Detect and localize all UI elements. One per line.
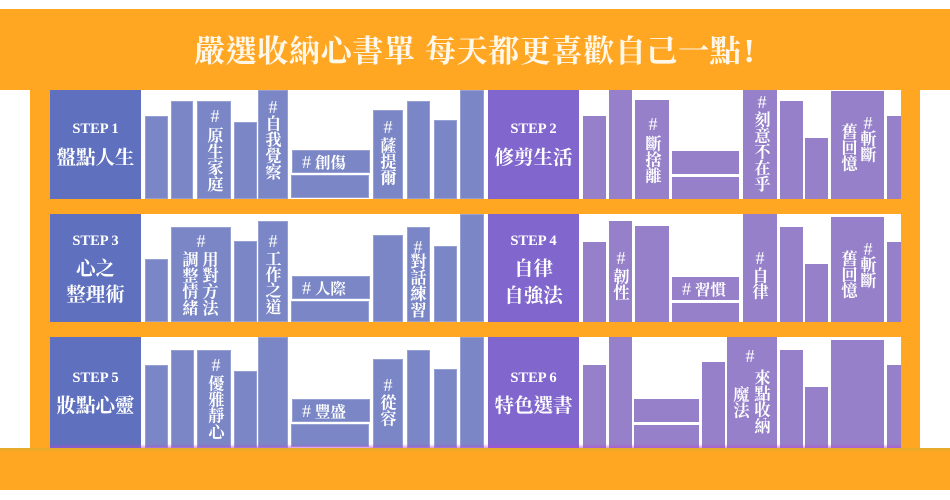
panel: step 2: STEP 2 (510, 121, 557, 137)
book: 豐盛 (292, 399, 370, 422)
book: 斷捨離: 斷捨離 (642, 135, 660, 184)
book: 自律 (743, 214, 777, 322)
book: 從容: # (384, 375, 392, 395)
panel: step 3: STEP 3 (72, 233, 119, 249)
panel: step 1: STEP 1 (72, 121, 119, 137)
book (805, 138, 828, 199)
book: 用對方法 調整情緒: # (196, 231, 206, 251)
book: 工作之道 (258, 221, 288, 322)
panel: step 5: STEP 5 (72, 370, 119, 386)
book: 豐盛: # 豐盛 (302, 401, 346, 421)
book: 用對方法 調整情緒: 調整情緒 (180, 251, 198, 316)
book (805, 387, 828, 448)
book (145, 259, 168, 322)
panel: step 5: 妝點心靈 (56, 396, 134, 417)
panel: step 5 (50, 337, 141, 448)
panel: step 4: 自強法 (504, 286, 563, 307)
book: 從容: 從容 (378, 394, 396, 426)
book (407, 350, 430, 448)
book (672, 177, 739, 199)
book (460, 90, 484, 199)
band between rows 1 and 2 (30, 199, 920, 214)
panel: step 3: 整理術 (66, 285, 125, 306)
book: 優雅靜心: 優雅靜心 (206, 375, 224, 440)
book (780, 227, 803, 322)
book (780, 350, 803, 448)
book (609, 337, 632, 448)
book: 來點收納魔法 (727, 337, 777, 448)
book (634, 425, 699, 448)
book (434, 246, 457, 322)
book (583, 365, 606, 448)
book: 斷捨離: # (648, 114, 658, 134)
book: 斬斷舊回憶: 斬斷 (858, 256, 876, 288)
book (407, 101, 430, 199)
book: 韌性: # (616, 248, 626, 268)
title: 嚴選收納心書單 每天都更喜歡自己一點! (194, 33, 755, 70)
book (805, 264, 828, 322)
book (460, 337, 484, 448)
book (583, 116, 606, 199)
book: 斬斷舊回憶: # (864, 113, 872, 133)
book (887, 116, 901, 199)
bottom orange band (0, 448, 950, 490)
book (434, 120, 457, 199)
book: 來點收納魔法: 來點收納 (752, 369, 770, 434)
frame: left orange column (30, 85, 50, 455)
book: 從容 (373, 359, 403, 448)
book (234, 241, 257, 322)
panel: step 4 (488, 214, 579, 322)
book: 習慣 (672, 277, 739, 300)
book: 斷捨離 (635, 100, 669, 199)
book: 薩提爾: # (384, 117, 392, 137)
book (291, 301, 369, 322)
book: 對話練習 (407, 227, 430, 322)
panel: step 2: 修剪生活 (494, 148, 572, 169)
book (634, 399, 699, 422)
book: 來點收納魔法: # (746, 346, 754, 366)
book: 工作之道: # (268, 231, 278, 251)
book: 斬斷舊回憶: 舊回憶 (838, 123, 856, 172)
book: 創傷 (292, 150, 370, 173)
book (460, 214, 484, 322)
book: 斬斷舊回憶: 斬斷 (858, 130, 876, 162)
book (831, 340, 884, 448)
book: 自律: 自律 (750, 267, 768, 299)
panel: step 3 (50, 214, 141, 322)
book (234, 371, 257, 448)
book: 原生家庭: # (210, 106, 220, 126)
book (234, 122, 257, 199)
book: 刻意不在乎: # (758, 92, 766, 112)
book (171, 350, 194, 448)
shelf row 3 (50, 337, 901, 448)
book: 薩提爾 (373, 110, 403, 199)
book: 原生家庭 (197, 101, 231, 199)
book: 來點收納魔法: 魔法 (730, 386, 748, 418)
book (780, 101, 803, 199)
panel: step 6: STEP 6 (510, 370, 557, 386)
panel: step 1: 盤點人生 (56, 148, 134, 169)
book: 斬斷舊回憶 (831, 217, 884, 322)
shelf row 1 (50, 90, 901, 199)
book: 對話練習: # (414, 237, 422, 257)
book: 薩提爾: 薩提爾 (378, 137, 396, 186)
book: 自我覺察 (258, 90, 288, 199)
shelf row 2 (50, 214, 901, 322)
book (672, 303, 739, 322)
book: 對話練習: 對話練習 (408, 253, 426, 318)
book: 用對方法 調整情緒: 用對方法 (200, 251, 218, 316)
book (373, 235, 403, 322)
book: 刻意不在乎: 刻意不在乎 (752, 111, 770, 192)
book (702, 362, 725, 448)
book: 刻意不在乎 (743, 90, 777, 199)
book: 優雅靜心: # (212, 355, 220, 375)
book: 自我覺察: # (268, 97, 278, 117)
panel: step 4: 自律 (514, 259, 553, 280)
book: 人際: # 人際 (302, 278, 346, 298)
book: 工作之道: 工作之道 (262, 250, 280, 315)
shelf bottom tint (50, 444, 901, 448)
book (887, 365, 901, 448)
band between rows 2 and 3 (30, 322, 920, 337)
book (635, 226, 669, 322)
book (609, 90, 632, 199)
book: 自律: # (756, 248, 764, 268)
title banner (0, 9, 950, 90)
book (434, 369, 457, 448)
book: 習慣: # 習慣 (682, 279, 726, 299)
panel: step 2 (488, 90, 579, 199)
book (887, 242, 901, 322)
book: 創傷: # 創傷 (302, 152, 346, 172)
book (291, 175, 369, 198)
panel: step 3: 心之 (76, 259, 115, 280)
book (583, 242, 606, 322)
panel: step 6: 特色選書 (494, 396, 572, 417)
book (145, 365, 168, 448)
book (291, 424, 369, 447)
book: 韌性 (609, 221, 632, 322)
panel: step 4: STEP 4 (510, 233, 557, 249)
book: 斬斷舊回憶 (831, 91, 884, 199)
book: 用對方法 調整情緒 (171, 227, 231, 322)
book (258, 337, 288, 448)
panel: step 6 (488, 337, 579, 448)
book: 人際 (292, 276, 370, 299)
book: 韌性: 韌性 (610, 268, 628, 300)
book: 斬斷舊回憶: 舊回憶 (838, 250, 856, 299)
book (171, 101, 193, 199)
book: 自我覺察: 自我覺察 (262, 115, 280, 180)
book: 原生家庭: 原生家庭 (204, 127, 222, 192)
book (672, 151, 739, 174)
book: 斬斷舊回憶: # (864, 239, 872, 259)
book: 優雅靜心 (197, 350, 231, 448)
frame: right orange column (901, 85, 920, 455)
book (145, 116, 168, 199)
panel: step 1 (50, 90, 141, 199)
